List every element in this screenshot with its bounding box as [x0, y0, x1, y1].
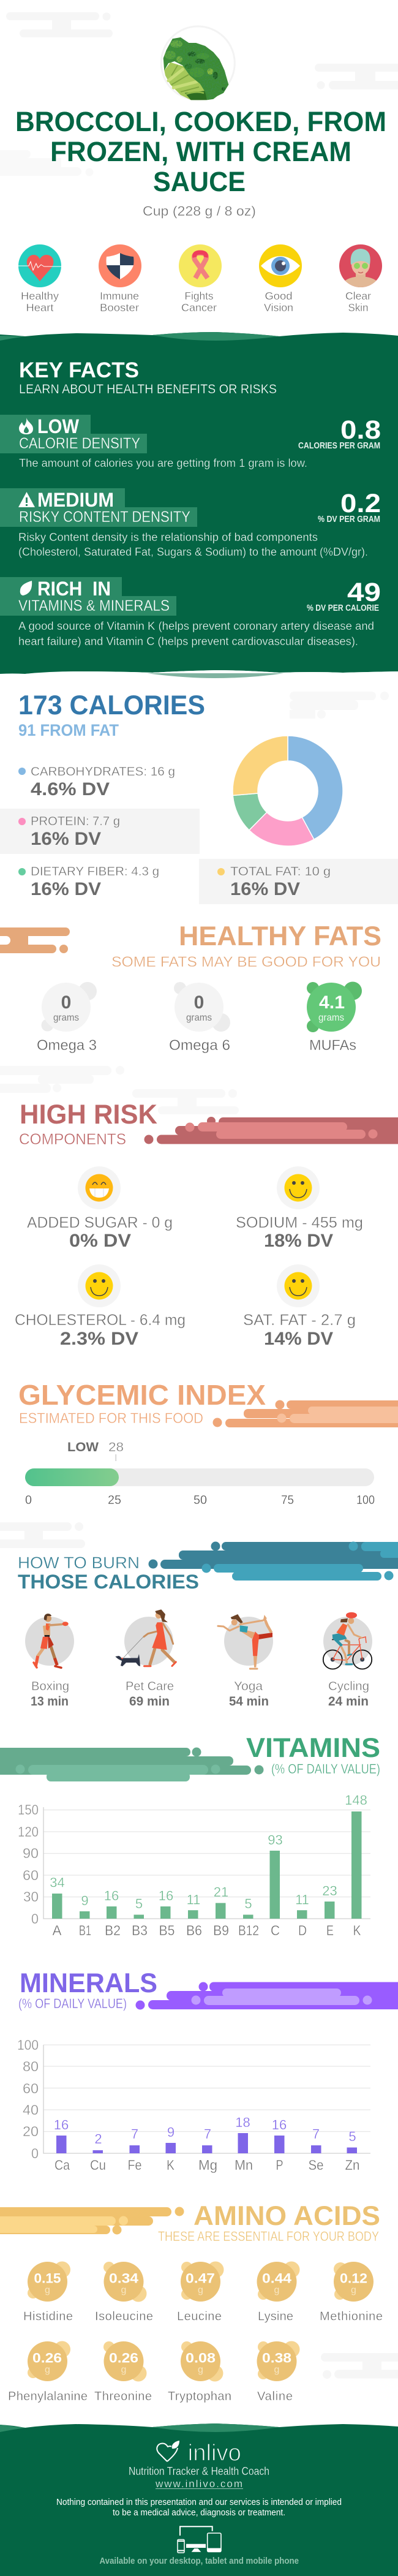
- decoration: glycemic banner: [213, 1400, 398, 1427]
- amino: valine: 0.38: [262, 2350, 291, 2366]
- omega 3: [37, 982, 97, 1054]
- fact: low calorie density: [0, 415, 381, 469]
- amino: threonine: g: [121, 2365, 126, 2375]
- amino: histidine: 0.15: [34, 2270, 61, 2286]
- availability note: Available on your desktop, tablet and mobile phone: [99, 2556, 299, 2566]
- bar chart: minerals: Fe: [127, 2157, 142, 2173]
- gauge: 100: [356, 1494, 375, 1507]
- bar chart: vitamins: D: [298, 1922, 307, 1938]
- omega 6: [169, 982, 230, 1054]
- heading: key facts: KEY FACTS: [19, 358, 139, 382]
- icon labels: Immune: [100, 290, 139, 302]
- bar chart: vitamins: 16: [104, 1888, 119, 1903]
- fact: low calorie density: 0.8: [340, 415, 381, 445]
- bar chart: minerals: Mn: [235, 2157, 253, 2173]
- icon labels: [21, 290, 371, 314]
- component: added sugar: [27, 1166, 173, 1251]
- legend: dietary fiber: 16% DV: [31, 879, 101, 899]
- decoration: high risk banner: [145, 1117, 398, 1144]
- icon: healthy heart: [18, 244, 61, 287]
- fact: rich in vitamins and minerals: heart failure) and Vitamin C (helps prevent cardiovascular diseases).: [18, 635, 358, 648]
- gauge: 28: [108, 1440, 124, 1454]
- activity: cycling: [323, 1612, 372, 1709]
- bar chart: vitamins: 11: [295, 1892, 309, 1908]
- activity: yoga: 54 min: [229, 1694, 269, 1709]
- heading: minerals: MINERALS: [20, 1968, 157, 1998]
- disclaimer: [56, 2497, 342, 2518]
- heading: burn: [18, 1554, 199, 1593]
- bar chart: vitamins: 23: [322, 1883, 337, 1898]
- bar chart: minerals: 7: [312, 2126, 320, 2142]
- amino: threonine: 0.26: [109, 2350, 138, 2366]
- amino: histidine: g: [45, 2285, 50, 2295]
- omega 6: grams: [186, 1013, 212, 1023]
- website link: www.inlivo.com: [155, 2478, 242, 2490]
- icon: warning triangle: [18, 492, 35, 507]
- decoration: burn banner: [148, 1541, 398, 1581]
- bar chart: vitamins: K: [353, 1922, 361, 1938]
- amino: phenylalanine: [8, 2341, 88, 2403]
- title: SAUCE: [153, 166, 246, 197]
- bar chart: vitamins: [18, 1792, 370, 1938]
- component: cholesterol: CHOLESTEROL - 6.4 mg: [15, 1312, 186, 1329]
- component: saturated fat: SAT. FAT - 2.7 g: [243, 1312, 356, 1329]
- component: added sugar: ADDED SUGAR - 0 g: [27, 1214, 173, 1231]
- bar chart: minerals: [17, 2037, 370, 2173]
- heading: high risk: COMPONENTS: [19, 1131, 126, 1148]
- bar chart: vitamins: 90: [23, 1845, 39, 1861]
- heading: high risk: [19, 1100, 157, 1148]
- fact: rich in vitamins and minerals: [0, 577, 381, 648]
- bar chart: vitamins: C: [271, 1922, 280, 1938]
- panel: calories: [0, 690, 398, 904]
- bar chart: minerals: 60: [23, 2080, 39, 2096]
- fact: medium risky content density: RISKY CONTENT DENSITY: [19, 508, 190, 526]
- heading: key facts: LEARN ABOUT HEALTH BENEFITS OR RISKS: [19, 382, 277, 396]
- bar chart: minerals: Se: [309, 2157, 323, 2173]
- amino: leucine: 0.47: [186, 2270, 215, 2286]
- activity: pet care: [115, 1609, 176, 1709]
- omega 3: 0: [61, 992, 71, 1013]
- legend: carbohydrates: 4.6% DV: [31, 779, 110, 799]
- activity: pet care: Pet Care: [126, 1680, 174, 1693]
- panel: footer: [0, 2423, 398, 2576]
- fact: medium risky content density: % DV PER GRAM: [318, 515, 380, 524]
- legend: protein: PROTEIN: 7.7 g: [31, 814, 120, 828]
- heading: vitamins: VITAMINS: [246, 1733, 380, 1763]
- activity: yoga: [218, 1614, 273, 1709]
- icon: clear skin face: [339, 244, 382, 288]
- decoration: minerals banner: [136, 1982, 398, 2009]
- bar chart: minerals: Mg: [198, 2157, 217, 2173]
- logo: inlivo: inlivo: [188, 2441, 241, 2466]
- heading: high risk: HIGH RISK: [20, 1100, 157, 1130]
- legend: total fat: 16% DV: [230, 879, 300, 899]
- bar chart: vitamins: B9: [213, 1922, 229, 1938]
- fact: rich in vitamins and minerals: A good source of Vitamin K (helps prevent coronary artery disease and: [18, 620, 374, 632]
- component: cholesterol: [15, 1264, 186, 1349]
- bar chart: minerals: 16: [54, 2117, 69, 2132]
- omega 3: grams: [53, 1013, 79, 1023]
- fact: rich in vitamins and minerals: VITAMINS & MINERALS: [18, 597, 170, 614]
- bar chart: minerals: 40: [23, 2102, 39, 2118]
- bar chart: minerals: 16: [272, 2117, 287, 2132]
- fact: low calorie density: CALORIES PER GRAM: [298, 441, 380, 451]
- fact: rich in vitamins and minerals: 49: [347, 578, 381, 607]
- heading: minerals: [18, 1968, 157, 2011]
- bar chart: minerals: 7: [204, 2126, 211, 2142]
- image: broccoli: [161, 26, 235, 100]
- legend: total fat: TOTAL FAT: 10 g: [230, 864, 331, 878]
- component: cholesterol: 2.3% DV: [60, 1329, 138, 1349]
- icon: flame: [19, 418, 33, 434]
- amino: threonine: [94, 2341, 152, 2403]
- fact: medium risky content density: MEDIUM: [37, 489, 114, 511]
- fact: low calorie density: LOW: [37, 415, 80, 437]
- panel: glycemic index: [18, 1379, 398, 1507]
- component: sodium: SODIUM - 455 mg: [236, 1214, 363, 1231]
- amino: isoleucine: [95, 2262, 153, 2323]
- amino: tryptophan: [168, 2341, 231, 2403]
- bar chart: minerals: 18: [235, 2115, 250, 2130]
- icon: immune booster shield: [99, 244, 141, 287]
- mufas: MUFAs: [309, 1037, 356, 1054]
- heading: healthy fats: SOME FATS MAY BE GOOD FOR YOU: [111, 954, 381, 970]
- gauge: 75: [281, 1494, 294, 1507]
- legend: dietary fiber: [18, 864, 159, 899]
- icon labels: Vision: [264, 301, 293, 314]
- bar chart: vitamins: 30: [23, 1889, 39, 1905]
- bar chart: minerals: Ca: [54, 2157, 70, 2173]
- bar chart: minerals: 7: [131, 2126, 138, 2142]
- bar chart: vitamins: 16: [159, 1888, 173, 1903]
- bar chart: vitamins: B12: [238, 1922, 259, 1938]
- amino: phenylalanine: Phenylalanine: [8, 2390, 88, 2403]
- heading: vitamins: [246, 1733, 380, 1777]
- decoration: amino banner: [0, 2207, 184, 2235]
- legend: total fat: [199, 859, 398, 904]
- bar chart: vitamins: 93: [268, 1832, 283, 1848]
- activity: boxing: Boxing: [31, 1680, 69, 1693]
- bar chart: vitamins: B6: [186, 1922, 202, 1938]
- mufas: [307, 981, 362, 1054]
- amino: methionine: [320, 2262, 383, 2323]
- bar chart: minerals: 20: [23, 2123, 39, 2139]
- bar chart: vitamins: 9: [81, 1893, 89, 1908]
- gauge: 25: [108, 1494, 121, 1507]
- gauge: 50: [193, 1494, 207, 1507]
- panel: healthy fats: [0, 921, 381, 1054]
- amino: threonine: Threonine: [94, 2390, 152, 2403]
- amino: phenylalanine: 0.26: [32, 2350, 62, 2366]
- amino: lysine: g: [274, 2285, 279, 2295]
- gauge: LOW: [67, 1440, 99, 1454]
- activity: cycling: Cycling: [328, 1680, 369, 1693]
- activity: boxing: [25, 1614, 74, 1709]
- amino: valine: Valine: [257, 2390, 293, 2403]
- activity: boxing: 13 min: [31, 1694, 69, 1709]
- bar chart: vitamins: 120: [18, 1824, 39, 1840]
- amino: isoleucine: g: [121, 2285, 126, 2295]
- amino: leucine: [177, 2262, 224, 2323]
- serving size: Cup (228 g / 8 oz): [143, 203, 256, 219]
- legend: dietary fiber: DIETARY FIBER: 4.3 g: [31, 864, 159, 878]
- icon labels: Good: [265, 290, 293, 302]
- bar chart: vitamins: B1: [79, 1922, 91, 1938]
- heading: burn: THOSE CALORIES: [18, 1571, 199, 1593]
- amino: valine: [257, 2341, 300, 2403]
- bar chart: vitamins: A: [53, 1922, 62, 1938]
- heading: glycemic index: [18, 1379, 266, 1427]
- bar chart: minerals: 0: [31, 2145, 39, 2161]
- amino: leucine: g: [198, 2285, 203, 2295]
- amino: histidine: [23, 2262, 73, 2323]
- activity: pet care: 69 min: [129, 1694, 170, 1709]
- heading: glycemic index: GLYCEMIC INDEX: [18, 1379, 266, 1411]
- omega 6: Omega 6: [169, 1037, 230, 1054]
- disclaimer: Nothing contained in this presentation and our services is intended or implied: [56, 2497, 342, 2507]
- decoration: vitamins banner: [0, 1747, 263, 1781]
- panel: key facts: [0, 332, 398, 678]
- panel: how to burn those calories: [18, 1541, 398, 1709]
- tagline: Nutrition Tracker & Health Coach: [129, 2465, 269, 2477]
- fact: medium risky content density: 0.2: [340, 489, 381, 518]
- fact: medium risky content density: Risky Content density is the relationship of bad components: [18, 531, 318, 543]
- heading: healthy fats: [111, 921, 381, 970]
- bar chart: vitamins: B2: [105, 1922, 121, 1938]
- panel: amino acids: [0, 2201, 383, 2403]
- bar chart: vitamins: 150: [18, 1802, 39, 1818]
- donut chart: [233, 736, 343, 846]
- bar chart: minerals: 9: [167, 2125, 175, 2140]
- legend: protein: [0, 809, 200, 854]
- bar chart: vitamins: 34: [50, 1875, 65, 1890]
- amino: lysine: 0.44: [262, 2270, 292, 2286]
- component: added sugar: 0% DV: [69, 1231, 131, 1251]
- bar chart: minerals: 5: [348, 2129, 356, 2144]
- bar chart: vitamins: 5: [244, 1896, 252, 1911]
- amino: methionine: Methionine: [320, 2310, 383, 2323]
- bar chart: vitamins: B5: [159, 1922, 175, 1938]
- mufas: grams: [318, 1013, 344, 1023]
- bar chart: vitamins: 0: [31, 1911, 39, 1927]
- icon: fights cancer ribbon: [179, 244, 222, 287]
- icon labels: Clear: [345, 290, 371, 302]
- heading: minerals: (% OF DAILY VALUE): [18, 1996, 127, 2011]
- bar chart: vitamins: 21: [214, 1884, 228, 1900]
- title: BROCCOLI, COOKED, FROM: [15, 106, 386, 137]
- activity: yoga: Yoga: [234, 1680, 263, 1693]
- bar chart: vitamins: 148: [345, 1792, 367, 1808]
- amino: phenylalanine: g: [45, 2365, 50, 2375]
- icon labels: Heart: [26, 301, 54, 314]
- heading: calories: 91 FROM FAT: [18, 721, 119, 739]
- heading: key facts: [19, 358, 277, 396]
- bar chart: minerals: Zn: [345, 2157, 360, 2173]
- gauge: 0: [25, 1494, 32, 1507]
- fact: medium risky content density: [0, 488, 381, 558]
- amino: tryptophan: Tryptophan: [168, 2390, 231, 2403]
- bar chart: vitamins: 5: [135, 1896, 143, 1911]
- fact: medium risky content density: (Cholesterol, Saturated Fat, Sugars & Sodium) to the amount (%DV/gr).: [18, 546, 368, 558]
- bar chart: vitamins: B3: [132, 1922, 148, 1938]
- omega 6: 0: [194, 992, 204, 1013]
- heading: calories: 173 CALORIES: [18, 690, 205, 720]
- amino: histidine: Histidine: [23, 2310, 73, 2323]
- bar chart: minerals: K: [167, 2157, 175, 2173]
- amino: lysine: [257, 2262, 300, 2323]
- icon: good vision eye: [259, 244, 302, 287]
- heading: amino acids: [158, 2201, 380, 2244]
- title: FROZEN, WITH CREAM: [50, 136, 351, 167]
- heading: calories: [18, 690, 205, 739]
- amino: tryptophan: 0.08: [186, 2350, 216, 2366]
- panel: vitamins: [0, 1733, 380, 1938]
- heading: glycemic index: ESTIMATED FOR THIS FOOD: [19, 1410, 203, 1427]
- component: sodium: [236, 1166, 363, 1251]
- amino: methionine: g: [351, 2285, 356, 2295]
- heading: healthy fats: HEALTHY FATS: [179, 921, 381, 951]
- mufas: 4.1: [319, 992, 345, 1013]
- legend: carbohydrates: [18, 765, 175, 799]
- bar chart: vitamins: 60: [23, 1867, 39, 1883]
- component: sodium: 18% DV: [264, 1231, 333, 1251]
- icon labels: Skin: [348, 301, 369, 314]
- heading: burn: HOW TO BURN: [18, 1554, 140, 1572]
- icon: leaf: [20, 581, 32, 595]
- bar chart: minerals: 100: [17, 2037, 39, 2053]
- health benefit icons: [18, 244, 382, 314]
- icon labels: Healthy: [21, 290, 59, 302]
- fact: low calorie density: The amount of calories you are getting from 1 gram is low.: [19, 457, 307, 469]
- bar chart: minerals: 2: [94, 2131, 102, 2147]
- bar chart: minerals: Cu: [90, 2157, 106, 2173]
- panel: minerals: [17, 1968, 398, 2173]
- activity: cycling: 24 min: [328, 1694, 369, 1709]
- amino: tryptophan: g: [198, 2365, 203, 2375]
- bar chart: vitamins: 11: [187, 1892, 200, 1908]
- gauge: [25, 1440, 375, 1507]
- amino: isoleucine: Isoleucine: [95, 2310, 153, 2323]
- component: saturated fat: 14% DV: [264, 1329, 333, 1349]
- icon labels: Cancer: [181, 301, 217, 314]
- component: saturated fat: [243, 1264, 356, 1349]
- title: [15, 106, 386, 197]
- amino: methionine: 0.12: [340, 2270, 367, 2286]
- fact: rich in vitamins and minerals: % DV PER CALORIE: [307, 603, 379, 613]
- fact: rich in vitamins and minerals: RICH IN: [37, 578, 111, 600]
- logo: inlivo: [157, 2441, 241, 2466]
- bar chart: vitamins: E: [326, 1922, 334, 1938]
- omega 3: Omega 3: [37, 1037, 97, 1054]
- fact: low calorie density: CALORIE DENSITY: [19, 435, 140, 452]
- amino: lysine: Lysine: [258, 2310, 293, 2323]
- legend: protein: 16% DV: [31, 829, 101, 849]
- icon: devices: [178, 2526, 221, 2553]
- icon labels: Booster: [100, 301, 139, 314]
- amino: isoleucine: 0.34: [109, 2270, 139, 2286]
- panel: high risk components: [15, 1100, 398, 1349]
- decoration: healthy fats banner: [0, 927, 70, 953]
- amino: leucine: Leucine: [177, 2310, 222, 2323]
- legend: carbohydrates: CARBOHYDRATES: 16 g: [31, 765, 175, 779]
- heading: amino acids: AMINO ACIDS: [193, 2201, 380, 2231]
- bar chart: minerals: P: [276, 2157, 283, 2173]
- icon labels: Fights: [185, 290, 214, 302]
- bar chart: minerals: 80: [23, 2058, 39, 2074]
- disclaimer: to be a medical advice, diagnosis or treatment.: [113, 2507, 285, 2518]
- amino: valine: g: [274, 2365, 279, 2375]
